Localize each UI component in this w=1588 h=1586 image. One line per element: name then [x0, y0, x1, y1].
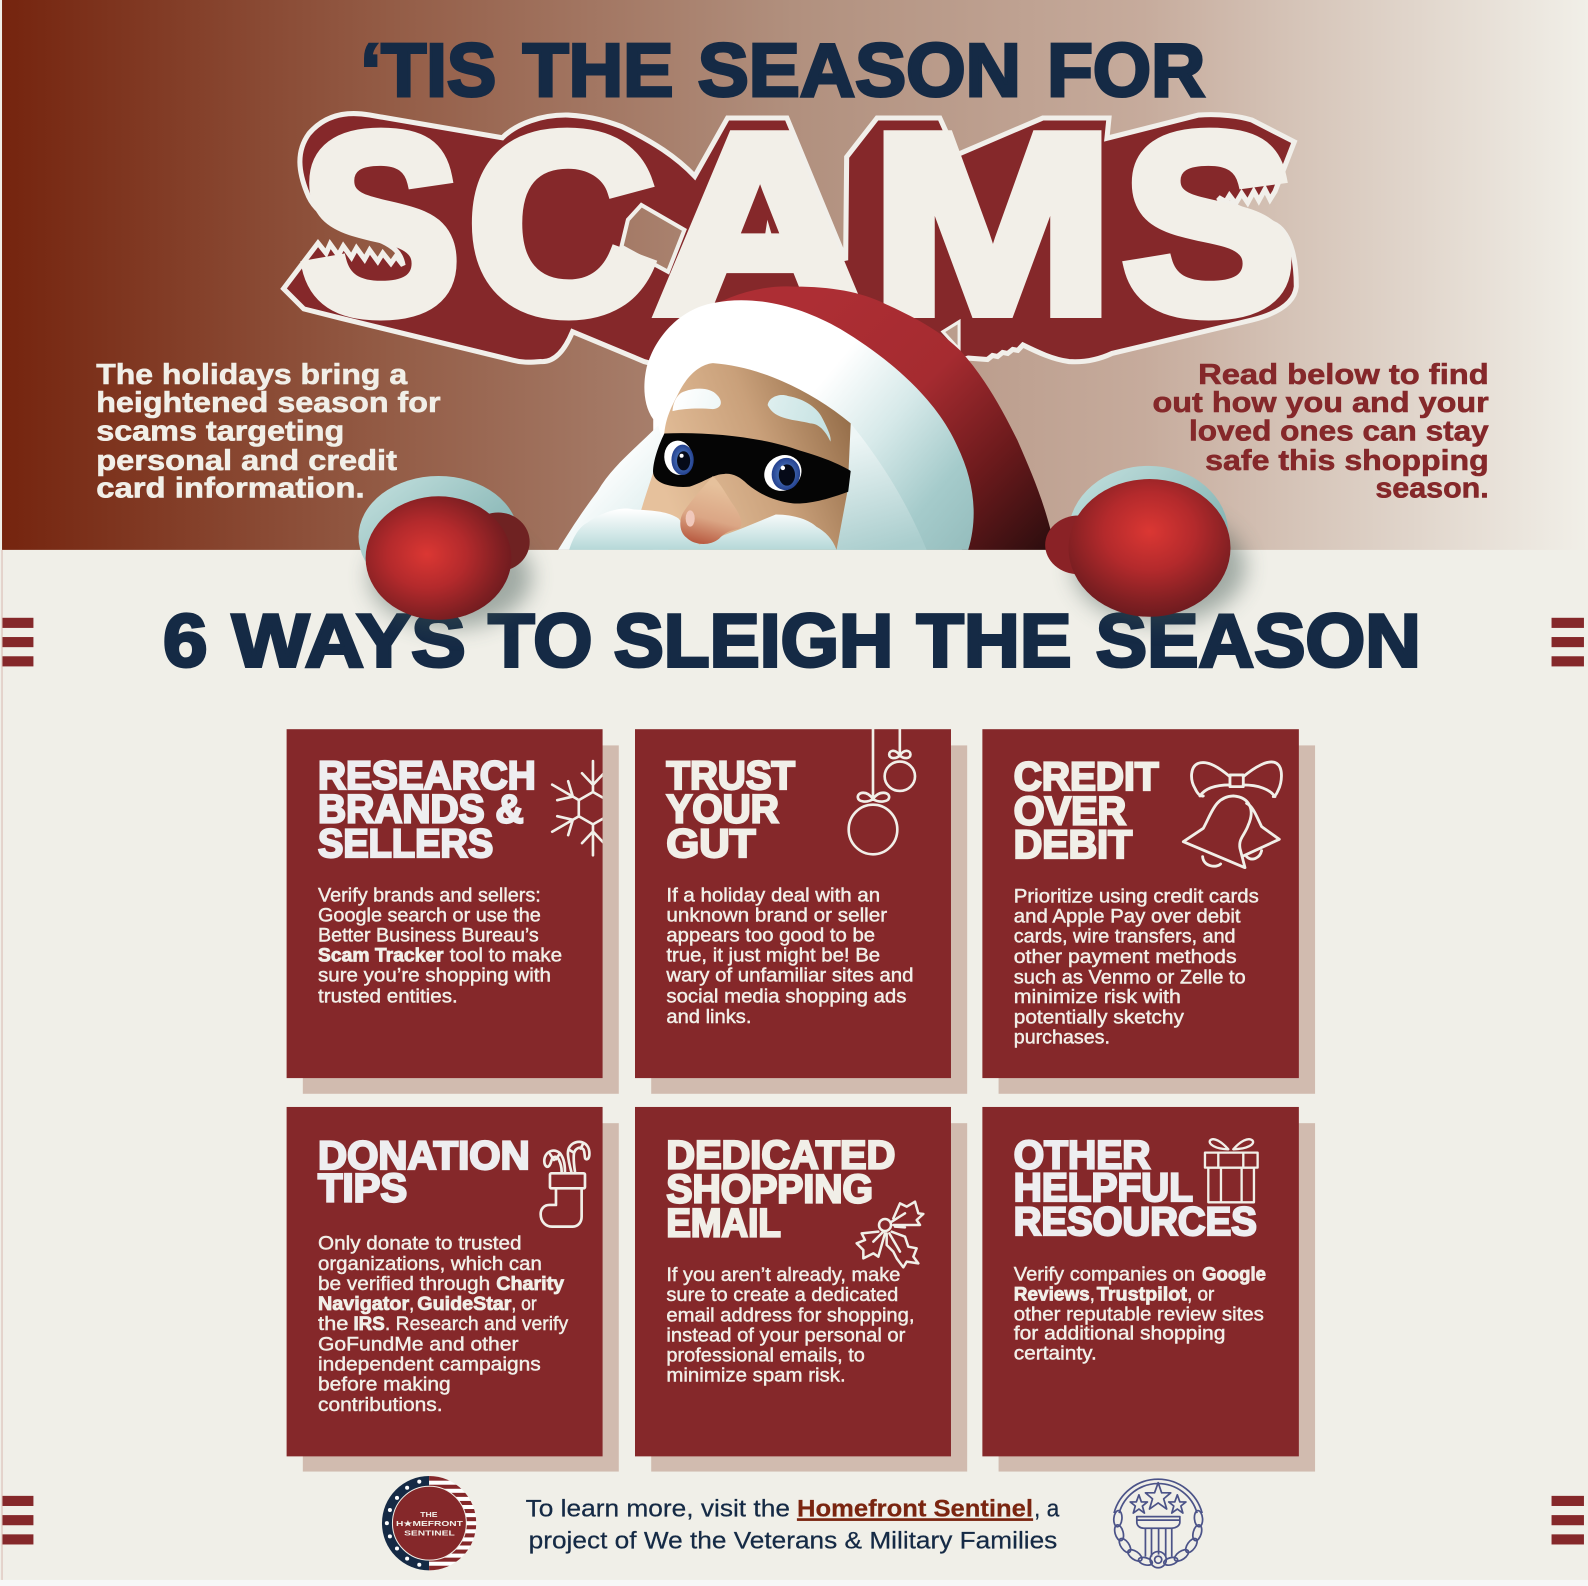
card body: contributions.	[318, 1394, 443, 1416]
card: other helpful resources	[982, 1107, 1315, 1472]
card body: Better Business Bureau’s	[318, 925, 539, 947]
card heading: DEDICATED	[666, 1133, 895, 1177]
card body: before making	[318, 1374, 451, 1396]
card body: minimize risk with	[1014, 986, 1181, 1008]
section heading: SEASON	[1096, 598, 1421, 682]
gap between C and A	[621, 205, 684, 272]
card body	[1014, 1263, 1266, 1365]
intro text right: Read below to find	[1198, 359, 1489, 391]
card body: Google search or use the	[318, 905, 541, 927]
card heading: DONATION	[318, 1134, 530, 1178]
right eyebrow	[768, 395, 831, 442]
card body: sure you’re shopping with	[318, 965, 551, 987]
big word SCAMS: M	[871, 82, 1114, 367]
card heading: TRUST	[666, 754, 795, 798]
card heading	[666, 754, 795, 866]
card heading	[318, 754, 536, 866]
logo: homefront sentinel	[382, 1476, 476, 1570]
card body: certainty.	[1014, 1343, 1097, 1365]
big word SCAMS: S	[1122, 82, 1295, 367]
card body: wary of unfamiliar sites and	[665, 965, 914, 987]
white sign panel	[2, 550, 1588, 1586]
bottom edge strip	[0, 1580, 1588, 1586]
left edge line	[2, 550, 3, 1580]
card body: potentially sketchy	[1014, 1006, 1184, 1028]
side bars right top	[1552, 618, 1584, 666]
card body: sure to create a dedicated	[666, 1284, 898, 1306]
card body: true, it just might be! Be	[666, 945, 880, 967]
card body: If a holiday deal with an	[666, 885, 880, 907]
footer text: project of We the Veterans & Military Families	[529, 1528, 1057, 1555]
card heading: GUT	[666, 822, 756, 866]
title line: THE	[523, 28, 673, 112]
card body: organizations, which can	[318, 1253, 542, 1275]
card: trust your gut	[635, 729, 967, 1094]
beard	[558, 425, 668, 550]
card body: Google	[1202, 1263, 1266, 1285]
side bars left top	[2, 618, 33, 666]
card body: tool to make	[450, 945, 562, 967]
card body: purchases.	[1014, 1027, 1110, 1049]
card body: ,	[1090, 1283, 1095, 1305]
card body: Only donate to trusted	[318, 1233, 522, 1255]
footer text: To learn more, visit the	[526, 1495, 790, 1522]
icon: gift box	[1205, 1139, 1258, 1202]
card body: Prioritize using credit cards	[1014, 886, 1259, 908]
logo: we the veterans	[1113, 1479, 1203, 1568]
card body: cards, wire transfers, and	[1014, 926, 1236, 948]
card heading: RESEARCH	[318, 754, 536, 798]
card: credit over debit	[982, 729, 1315, 1094]
card body: and Apple Pay over debit	[1014, 906, 1241, 928]
card heading: OVER	[1014, 789, 1126, 833]
section heading: SLEIGH	[614, 598, 893, 682]
card body: . Research and verify	[385, 1313, 568, 1335]
card body: and links.	[666, 1006, 751, 1028]
card heading: RESOURCES	[1014, 1200, 1257, 1244]
card heading: DEBIT	[1014, 823, 1132, 867]
card body: Charity	[496, 1273, 564, 1295]
section heading: WAYS	[232, 598, 466, 682]
side bars left bottom	[2, 1496, 33, 1544]
bandit mask	[653, 433, 851, 503]
intro text left: card information.	[96, 472, 365, 504]
right mitten	[1045, 466, 1246, 623]
card body	[318, 885, 562, 1008]
card body: Navigator	[318, 1293, 409, 1315]
card body: Verify companies on	[1014, 1263, 1195, 1285]
card heading	[1014, 755, 1159, 867]
logo: homefront sentinel: THE	[420, 1510, 438, 1519]
section heading: 6	[163, 598, 208, 682]
card body: be verified through	[318, 1273, 490, 1295]
card: dedicated shopping email	[635, 1107, 967, 1472]
card heading: OTHER	[1014, 1133, 1150, 1177]
card body	[665, 885, 914, 1028]
moustache	[569, 509, 837, 550]
logo: homefront sentinel: SENTINEL	[404, 1528, 455, 1537]
card body: GuideStar	[417, 1293, 512, 1315]
card body: ,	[409, 1293, 414, 1315]
header banner	[2, 0, 1588, 550]
card body: Verify brands and sellers:	[318, 885, 541, 907]
card body: unknown brand or seller	[666, 905, 888, 927]
extruded backdrop of the SCAMS word	[284, 114, 1296, 405]
card body: other reputable review sites	[1014, 1303, 1264, 1325]
card heading	[666, 1133, 895, 1246]
santa illustration	[558, 286, 1055, 550]
icon: stocking with candy canes	[541, 1142, 589, 1227]
intro text right	[1153, 359, 1489, 504]
card body: , or	[1187, 1283, 1215, 1305]
intro text right: season.	[1375, 472, 1489, 504]
santa hat	[699, 286, 1055, 550]
intro text left	[96, 359, 441, 504]
intro text right: loved ones can stay	[1189, 416, 1489, 448]
card heading: TIPS	[318, 1167, 407, 1211]
card body	[666, 1264, 915, 1386]
card heading: BRANDS &	[318, 788, 524, 832]
big word SCAMS: S	[300, 82, 460, 367]
icon: snowflake	[550, 760, 603, 857]
icon: bells	[1183, 762, 1281, 868]
intro text right: safe this shopping	[1205, 445, 1489, 477]
title line: FOR	[1047, 28, 1205, 112]
card body: trusted entities.	[318, 986, 458, 1008]
card body: Reviews	[1014, 1283, 1090, 1305]
card body: , or	[511, 1293, 537, 1315]
card body: instead of your personal or	[666, 1325, 906, 1347]
card heading: EMAIL	[666, 1202, 781, 1246]
intro text right: out how you and your	[1153, 387, 1489, 419]
fur trim	[644, 300, 974, 550]
card body	[318, 1233, 568, 1416]
left eyebrow	[672, 389, 721, 411]
card body: social media shopping ads	[666, 986, 907, 1008]
card heading: YOUR	[666, 788, 779, 832]
card body: Trustpilot	[1097, 1283, 1187, 1305]
hood fold	[837, 423, 927, 550]
right eye	[757, 448, 808, 498]
A counter detail	[764, 220, 774, 242]
icon: ornaments	[849, 729, 915, 854]
card body: GoFundMe and other	[318, 1334, 519, 1356]
card body	[1014, 886, 1259, 1049]
card body: If you aren’t already, make	[666, 1264, 900, 1286]
footer text: , a	[1034, 1495, 1060, 1522]
title line: SEASON	[698, 28, 1021, 112]
side bars right bottom	[1552, 1496, 1584, 1544]
logo: homefront sentinel: H★MEFRONT	[396, 1519, 463, 1528]
card heading: SHOPPING	[666, 1168, 873, 1212]
section heading: TO	[488, 598, 592, 682]
big word SCAMS: C	[467, 82, 656, 367]
card body: professional emails, to	[666, 1345, 865, 1367]
footer text: Homefront Sentinel	[797, 1495, 1033, 1522]
card body: email address for shopping,	[666, 1305, 915, 1327]
card body: minimize spam risk.	[666, 1364, 846, 1386]
intro text left: scams targeting	[96, 416, 344, 448]
card body: Scam Tracker	[318, 945, 444, 967]
left mitten	[359, 476, 532, 628]
card heading: HELPFUL	[1014, 1166, 1193, 1210]
intro text left: heightened season for	[96, 387, 441, 419]
section heading: THE	[917, 598, 1071, 682]
big word SCAMS: A	[654, 82, 866, 367]
card body: such as Venmo or Zelle to	[1014, 966, 1246, 988]
card heading	[318, 1134, 530, 1211]
card body: the	[318, 1313, 348, 1335]
card body: independent campaigns	[318, 1354, 541, 1376]
card heading: CREDIT	[1014, 755, 1159, 799]
card heading	[1014, 1133, 1257, 1244]
face	[641, 363, 851, 550]
left eye	[662, 438, 695, 477]
card heading: SELLERS	[318, 822, 493, 866]
notch beside hat	[943, 322, 959, 349]
card body: appears too good to be	[666, 925, 875, 947]
card body: for additional shopping	[1014, 1323, 1225, 1345]
intro text left: The holidays bring a	[96, 359, 407, 391]
card: research brands and sellers	[287, 729, 639, 1094]
icon: holly	[857, 1202, 923, 1267]
card body: other payment methods	[1014, 946, 1237, 968]
title line: ‘TIS	[361, 28, 496, 112]
intro text left: personal and credit	[96, 445, 398, 477]
card body: IRS	[353, 1313, 385, 1335]
card: donation tips	[287, 1107, 619, 1472]
nose	[680, 476, 741, 544]
footer text	[526, 1495, 1060, 1555]
